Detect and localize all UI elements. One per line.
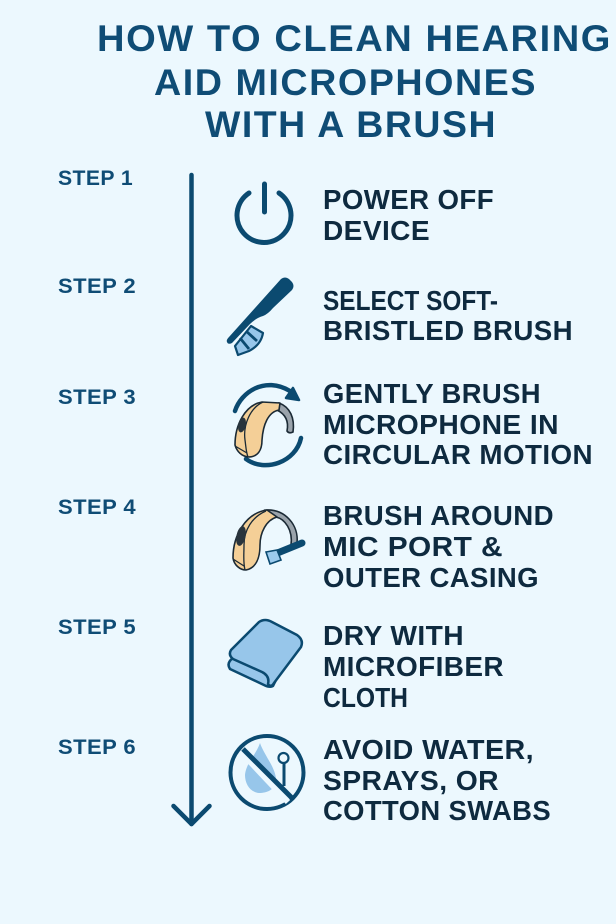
step 6 text: SPRAYS, OR xyxy=(323,765,499,796)
step 3 text: MICROPHONE IN xyxy=(323,409,559,440)
step 1 icon: power xyxy=(237,184,291,242)
step 2 text: BRISTLED BRUSH xyxy=(323,315,573,346)
step 5 text: CLOTH xyxy=(323,682,408,713)
step 1 text: POWER OFF xyxy=(323,184,494,215)
step 3 text: GENTLY BRUSH xyxy=(323,378,541,409)
step 4 icon: hearing aid with brush xyxy=(233,510,302,570)
step 5 text: MICROFIBER xyxy=(323,651,504,682)
step 3 text xyxy=(323,378,593,470)
step labels: STEP 1 xyxy=(58,167,133,190)
step labels: STEP 6 xyxy=(58,736,136,759)
step 5 text xyxy=(323,620,504,713)
step labels xyxy=(58,167,136,759)
step 1 text: DEVICE xyxy=(323,215,430,246)
step labels: STEP 4 xyxy=(58,496,136,519)
step 2 icon: brush xyxy=(227,278,294,355)
step 6 text: COTTON SWABS xyxy=(323,795,551,826)
step labels: STEP 3 xyxy=(58,386,136,409)
step 2 text: SELECT SOFT- xyxy=(323,285,498,316)
step labels: STEP 5 xyxy=(58,616,136,639)
step 4 text: MIC PORT & xyxy=(323,531,503,562)
step 4 text: BRUSH AROUND xyxy=(323,500,554,531)
step 3 text: CIRCULAR MOTION xyxy=(323,439,593,470)
title xyxy=(97,18,612,145)
step labels: STEP 2 xyxy=(58,275,136,298)
step 6 text xyxy=(323,734,551,826)
step 5 text: DRY WITH xyxy=(323,620,464,651)
title: AID MICROPHONES xyxy=(154,62,537,103)
title: WITH A BRUSH xyxy=(205,104,497,145)
step 4 text xyxy=(323,500,554,593)
step 5 icon: microfiber cloth xyxy=(229,620,302,687)
step 3 icon: hearing aid with rotation arrows xyxy=(235,385,301,465)
step 2 text xyxy=(323,285,573,346)
timeline arrow xyxy=(174,175,210,824)
step 1 text xyxy=(323,184,494,246)
step 6 text: AVOID WATER, xyxy=(323,734,534,765)
step 6 icon: no water or swabs xyxy=(230,736,304,809)
title: HOW TO CLEAN HEARING xyxy=(97,18,612,59)
step 4 text: OUTER CASING xyxy=(323,562,539,593)
